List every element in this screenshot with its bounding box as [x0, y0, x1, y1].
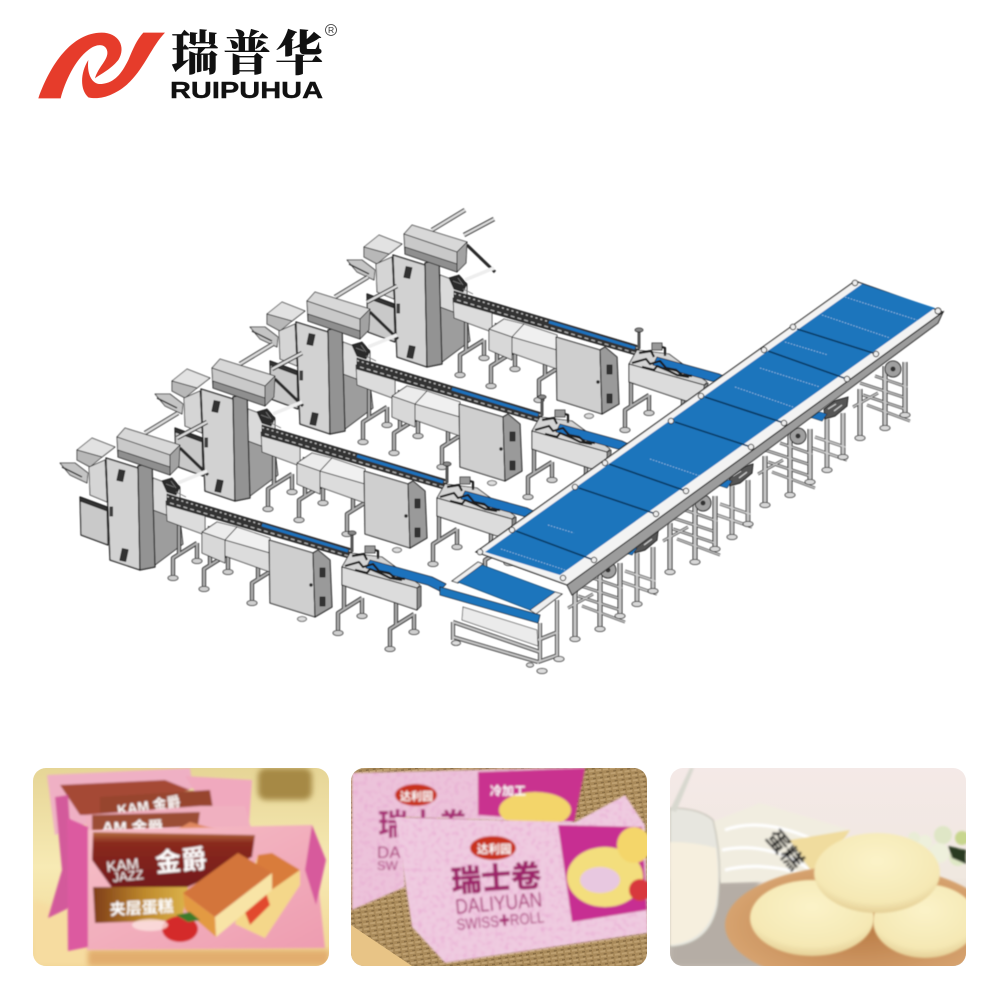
- front pack: 达利园: [477, 842, 512, 856]
- main blue conveyor: [476, 280, 943, 595]
- logo Chinese name: 瑞普华: [171, 28, 323, 81]
- photo: Daliyuan Swiss roll: [351, 767, 651, 966]
- end rail left: [452, 562, 483, 583]
- table cloth: [670, 880, 760, 966]
- swiss roll picture: [567, 847, 643, 907]
- wrapped pack: 蛋糕: [761, 825, 809, 875]
- machine: four flow-wrap packaging lines: [60, 210, 733, 652]
- rear pack: 瑞士卷: [378, 809, 468, 842]
- logo: Ruipuhua: [38, 24, 337, 103]
- wrapped pack: [720, 822, 850, 884]
- SWISS ROLL label: SWISS✚ROLL: [456, 909, 545, 934]
- packaging line 2: [155, 344, 541, 583]
- flowers: [908, 826, 969, 866]
- rear packs: AM 金爵: [102, 818, 163, 837]
- DALIYUAN label: DALIYUAN: [454, 888, 543, 919]
- conveyor side apron: [567, 312, 943, 595]
- conveyor blue belt: [485, 284, 935, 575]
- stand white panel: [462, 607, 538, 646]
- bun right: [873, 884, 977, 958]
- conveyor frame rails: [476, 281, 943, 585]
- rear pack: [352, 767, 585, 910]
- photo: Kam Jazz sandwich cake: [33, 768, 329, 966]
- stand feet: [452, 641, 564, 674]
- belt segment dividers: [516, 329, 873, 559]
- photo: soft milk buns: [670, 768, 966, 966]
- main pack: JAZZ: [112, 867, 144, 885]
- pack brand text: KAM: [106, 856, 140, 876]
- wooden plate: [724, 868, 966, 966]
- wood tray: [351, 925, 412, 966]
- icon: red swirl logo mark: [38, 33, 165, 98]
- photo 2 woven background: [351, 768, 647, 966]
- packaging line 3: [250, 277, 636, 516]
- registered mark: [326, 24, 336, 36]
- blurred jar in background: [258, 768, 312, 800]
- rear pack: SW: [377, 858, 399, 873]
- photo 1 background: [33, 768, 329, 966]
- belt dotted seams: [501, 297, 917, 570]
- packaging line 1 (front): [60, 413, 446, 652]
- front logo: [470, 836, 516, 860]
- rear pack: DA: [377, 843, 401, 862]
- wooden tray strips: [33, 942, 87, 966]
- main pack: 夹层蛋糕: [109, 898, 174, 919]
- strawberry: [162, 916, 198, 942]
- stand frame: [453, 600, 558, 662]
- main pack: [67, 818, 326, 951]
- front transfer conveyor and stand: [440, 562, 564, 674]
- front pack: [395, 795, 651, 963]
- logo English name: RUIPUHUA: [170, 77, 323, 103]
- lower blue strip: [440, 587, 540, 623]
- main pack: 金爵: [154, 844, 208, 878]
- rear logo: [395, 784, 437, 806]
- photo 3 background: [670, 768, 966, 966]
- sponge cake slices: [235, 853, 300, 938]
- conveyor joint rollers: [477, 280, 941, 581]
- support frames under main conveyor: [568, 361, 910, 642]
- milk glass: [670, 768, 720, 947]
- product name: 瑞士卷: [450, 860, 542, 899]
- packaging line 4 (rear): [347, 210, 733, 449]
- end rail right: [530, 592, 562, 614]
- bun top: [814, 833, 940, 913]
- small upper blue belt: [458, 565, 555, 610]
- rear pack: 冷加工: [490, 783, 526, 798]
- rear packs: KAM 金爵: [116, 793, 182, 818]
- registered mark: R: [328, 25, 334, 35]
- rear pack: 达利园: [400, 789, 433, 803]
- rear packs: [47, 768, 252, 918]
- bun left: [750, 880, 874, 956]
